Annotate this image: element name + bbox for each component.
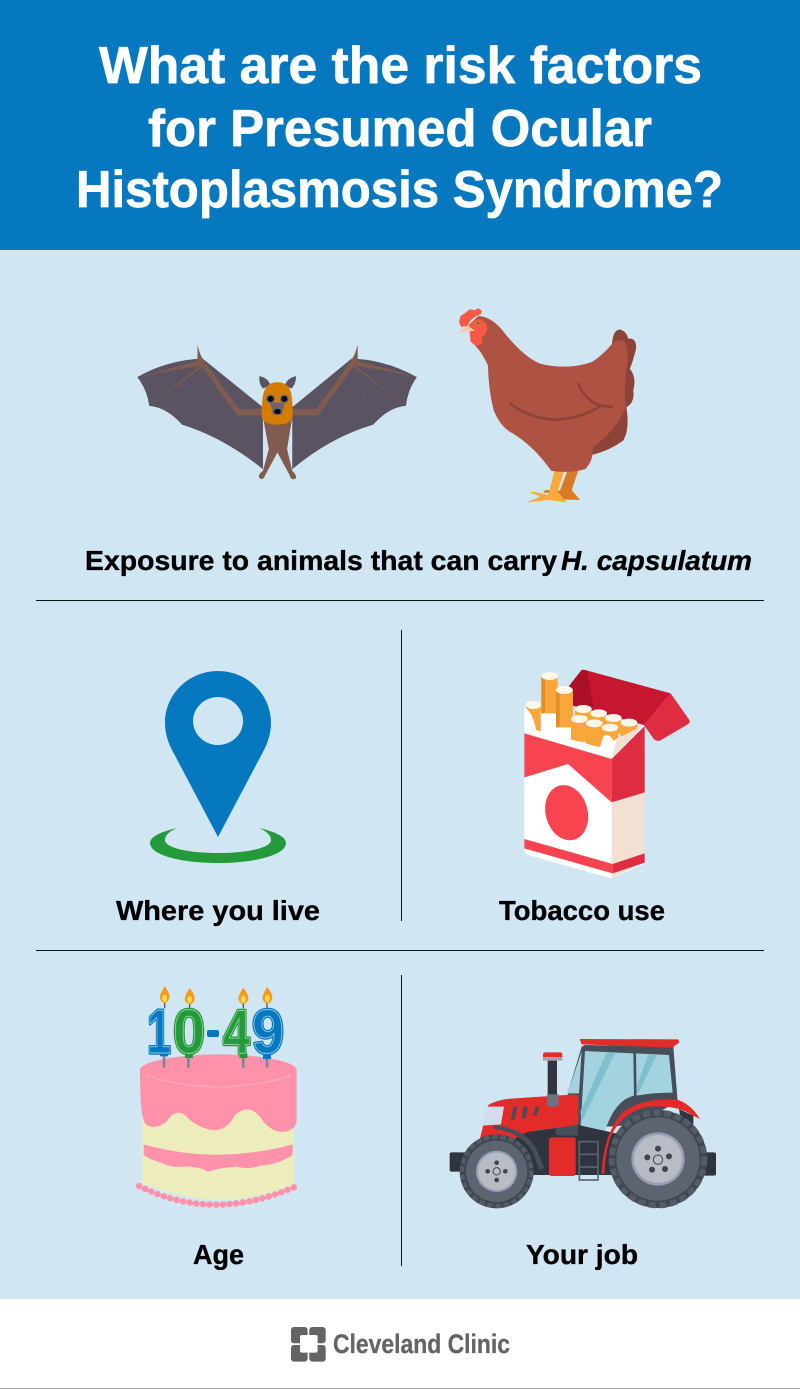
icon: bat bbox=[137, 344, 417, 479]
candle numbers: 4 bbox=[223, 998, 250, 1067]
title: for Presumed Ocular bbox=[148, 100, 652, 158]
panel: age bbox=[139, 986, 297, 1270]
candle numbers bbox=[147, 998, 284, 1067]
front wheel bbox=[460, 1134, 534, 1208]
rear wheel bbox=[609, 1110, 707, 1208]
panel: animal exposure bbox=[85, 308, 752, 576]
icon: tractor bbox=[450, 1039, 716, 1208]
logo: Cleveland Clinic: Cleveland Clinic bbox=[333, 1329, 510, 1359]
panel: your job bbox=[450, 1039, 716, 1270]
caption: tobacco use: Tobacco use bbox=[499, 895, 665, 926]
caption: your job: Your job bbox=[526, 1239, 638, 1270]
title bbox=[76, 37, 723, 219]
icon: birthday cake bbox=[139, 986, 297, 1205]
candle numbers: 1 bbox=[147, 998, 171, 1067]
icon: chicken bbox=[458, 308, 636, 503]
candle numbers: 0 bbox=[173, 998, 205, 1067]
candle numbers: 9 bbox=[252, 998, 284, 1067]
header banner bbox=[0, 0, 800, 250]
caption: where you live: Where you live bbox=[116, 895, 320, 926]
title: What are the risk factors bbox=[99, 37, 702, 95]
icon: location pin bbox=[150, 671, 286, 863]
candle numbers: 0 bbox=[173, 998, 205, 1067]
caption: animals: Exposure to animals that can carry bbox=[85, 545, 557, 576]
title: Histoplasmosis Syndrome? bbox=[76, 161, 723, 219]
candle numbers: 4 bbox=[223, 998, 250, 1067]
footer bbox=[0, 1299, 800, 1389]
caption: animals bbox=[85, 545, 752, 576]
caption: age: Age bbox=[193, 1239, 244, 1270]
panel: tobacco use bbox=[499, 670, 690, 926]
logo: Cleveland Clinic bbox=[291, 1327, 510, 1362]
candle numbers: 1 bbox=[147, 998, 171, 1067]
icon: cigarette pack bbox=[524, 670, 690, 879]
caption: animals: H. capsulatum bbox=[561, 545, 752, 576]
candle numbers: 9 bbox=[252, 998, 284, 1067]
panel: where you live bbox=[116, 671, 320, 926]
